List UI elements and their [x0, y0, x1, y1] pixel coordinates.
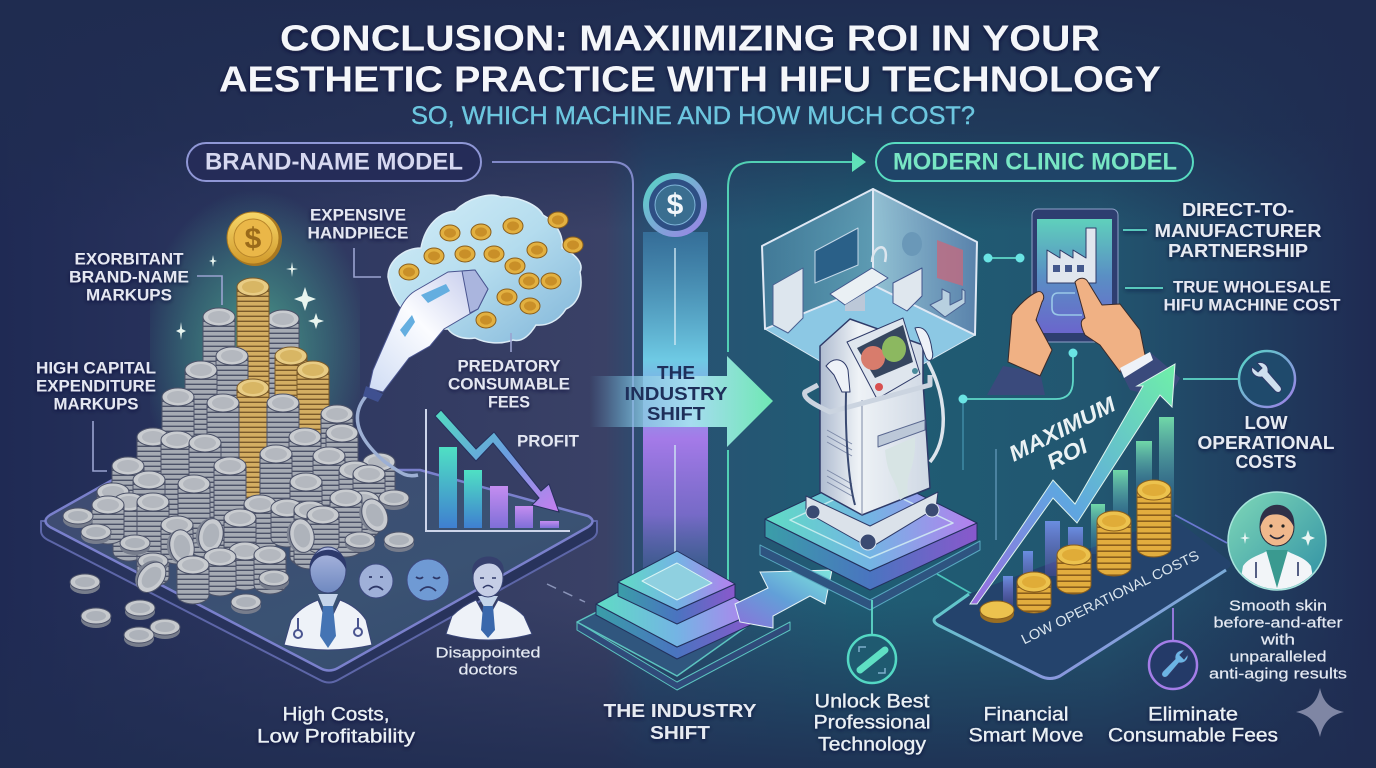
HIFU machine: [805, 318, 943, 550]
label: direct-to-manufacturer partnership: [1123, 200, 1322, 288]
machine handle bar: [805, 375, 930, 412]
ROI platform: [934, 515, 1231, 678]
light beams: [674, 248, 676, 560]
title: [219, 18, 1161, 100]
vertical light column: [643, 232, 708, 577]
title: AESTHETIC PRACTICE WITH HIFU TECHNOLOGY: [219, 58, 1161, 100]
caption: unlock best professional technology: Professional: [814, 712, 930, 734]
icon: wrench low operational costs: [1183, 351, 1295, 407]
label: disappointed doctors: doctors: [458, 662, 518, 678]
label: disappointed doctors: [436, 644, 540, 678]
label: low operational costs on platform: LOW OPERATIONAL COSTS: [1018, 547, 1202, 647]
text: smooth skin results: [1209, 598, 1347, 682]
label: true wholesale cost: HIFU MACHINE COST: [1164, 296, 1341, 314]
label: low operational costs: [1198, 413, 1334, 472]
hands: [987, 278, 1180, 400]
handpiece with cord: [357, 270, 488, 476]
connector lines around the centre column: [492, 152, 866, 640]
caption: high costs: Low Profitability: [257, 726, 416, 748]
label: maximum ROI: MAXIMUM: [1005, 391, 1120, 466]
label: high capital expenditure: HIGH CAPITAL: [36, 358, 156, 378]
caption: financial smart move: Financial: [984, 704, 1068, 726]
isometric platform: [41, 470, 597, 682]
label: exorbitant markups: EXORBITANT: [74, 250, 184, 268]
label: predatory consumable fees: CONSUMABLE: [448, 374, 570, 394]
isometric clinic room: [762, 189, 977, 392]
handpiece on machine: [826, 360, 850, 392]
caption: financial smart move: [968, 704, 1084, 746]
label: expensive handpiece: HANDPIECE: [308, 224, 408, 242]
label: exorbitant markups: [69, 250, 189, 304]
label: direct-to-manufacturer partnership: DIRECT-TO-: [1182, 200, 1294, 220]
text: smooth skin results: before-and-after: [1214, 614, 1342, 632]
dollar badge: [643, 173, 707, 237]
label: high capital expenditure: EXPENDITURE: [36, 376, 156, 396]
icon: unlock technology badge: [848, 635, 896, 683]
arrow to the machine: [735, 570, 832, 628]
large gold coin: [227, 212, 282, 266]
label: predatory consumable fees: PREDATORY: [458, 356, 561, 376]
shift arrow with label: [590, 356, 773, 447]
caption: unlock best professional technology: Unlock Best: [814, 692, 930, 712]
leader lines: [93, 248, 511, 471]
machine body: [820, 319, 930, 515]
happy doctor portrait: [1228, 492, 1326, 595]
cloud of coins: [388, 195, 583, 343]
label: maximum ROI: ROI: [1043, 433, 1092, 475]
shift arrow with label: INDUSTRY: [624, 384, 728, 404]
caption: eliminate consumable fees: [1108, 704, 1278, 746]
caption: unlock best professional technology: [814, 692, 930, 756]
brand-name model pill: BRAND-NAME MODEL: [205, 148, 463, 176]
caption: the industry shift: SHIFT: [650, 723, 710, 743]
green glow behind the coin pile: [150, 190, 360, 480]
label: low operational costs: COSTS: [1236, 452, 1296, 472]
large gold coin: $: [245, 222, 262, 256]
title: CONCLUSION: MAXIIMIZING ROI IN YOUR: [280, 18, 1100, 58]
modern clinic pill: [876, 143, 1193, 181]
text: smooth skin results: unparalleled: [1230, 648, 1326, 666]
machine base and wheels: [806, 492, 939, 550]
modern clinic pill: MODERN CLINIC MODEL: [893, 148, 1177, 176]
label: high capital expenditure: MARKUPS: [54, 394, 138, 414]
panel: industry shift column: [577, 173, 832, 743]
rising ROI arrow: [970, 364, 1175, 604]
label: direct-to-manufacturer partnership: PARTNERSHIP: [1168, 241, 1308, 261]
panel: brand-name model: [36, 143, 597, 748]
lower platform: [760, 470, 980, 610]
gold coin stacks: [980, 480, 1171, 623]
label: exorbitant markups: BRAND-NAME: [69, 268, 189, 286]
stepped platform: [577, 551, 790, 690]
caption: eliminate consumable fees: Eliminate: [1148, 704, 1238, 726]
machine screen: [847, 318, 920, 399]
icon: wrench eliminate fees: [1149, 608, 1197, 689]
shift arrow with label: SHIFT: [647, 404, 705, 424]
caption: eliminate consumable fees: Consumable Fees: [1108, 726, 1278, 746]
icon: four-point star watermark: [1296, 688, 1344, 737]
label: predatory consumable fees: FEES: [488, 392, 530, 412]
caption: high costs: High Costs,: [282, 704, 390, 726]
label: expensive handpiece: EXPENSIVE: [310, 206, 406, 224]
connector dots: [937, 254, 1078, 594]
caption: financial smart move: Smart Move: [968, 726, 1084, 746]
label: expensive handpiece: [308, 206, 408, 242]
panel: modern clinic model: [760, 143, 1347, 756]
caption: unlock best professional technology: Technology: [818, 734, 927, 756]
sad face icons: [359, 559, 449, 601]
label: true wholesale cost: TRUE WHOLESALE: [1173, 278, 1331, 296]
text: smooth skin results: anti-aging results: [1209, 666, 1347, 682]
label: exorbitant markups: MARKUPS: [86, 286, 172, 304]
caption: the industry shift: [604, 701, 756, 743]
label: high capital expenditure: [36, 358, 156, 414]
doctor: neutral: [284, 547, 372, 650]
text: smooth skin results: Smooth skin: [1229, 598, 1327, 614]
shift arrow with label: THE: [657, 363, 695, 383]
caption: the industry shift: THE INDUSTRY: [604, 701, 756, 721]
profit chart: [426, 409, 580, 531]
subtitle: SO, WHICH MACHINE AND HOW MUCH COST?: [411, 102, 975, 130]
label: predatory consumable fees: [448, 356, 570, 412]
doctor: disappointed: [446, 556, 532, 640]
connector to badge: [871, 600, 873, 635]
label: disappointed doctors: Disappointed: [436, 644, 540, 662]
ROI chart with bars: [970, 364, 1175, 606]
profit label: PROFIT: [517, 432, 580, 450]
caption: high costs: [257, 704, 416, 748]
label: true wholesale cost: [1164, 278, 1341, 314]
dollar badge: $: [667, 188, 684, 222]
label: low operational costs: LOW: [1244, 413, 1288, 433]
text: smooth skin results: with: [1260, 632, 1295, 648]
dashed link: [547, 584, 585, 602]
label: low operational costs: OPERATIONAL: [1198, 433, 1334, 453]
label: direct-to-manufacturer partnership: MANUFACTURER: [1154, 221, 1322, 241]
brand-name model pill: [187, 143, 481, 181]
icon: factory: [1047, 228, 1096, 283]
tablet with factory: [1032, 209, 1118, 342]
sparkles: [176, 255, 324, 340]
coin pile: [63, 278, 414, 647]
